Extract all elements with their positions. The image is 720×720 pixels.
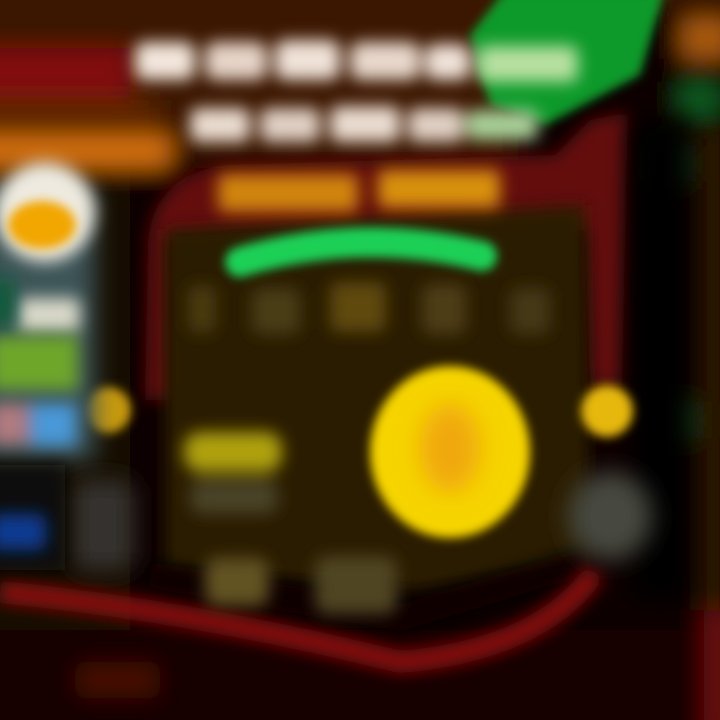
- left knob: [85, 387, 131, 433]
- top right green banner: [470, 0, 665, 125]
- gold heading: [218, 170, 500, 212]
- button 1: [205, 558, 269, 606]
- dark strip under screen: [150, 560, 590, 618]
- slot machine cabinet: [0, 112, 688, 662]
- large gold coin: [370, 366, 530, 538]
- dark right edge: [632, 120, 688, 600]
- neighbour body: [0, 190, 95, 460]
- stat caption: [190, 480, 278, 514]
- orange dial centre: [8, 201, 76, 249]
- cabinet screen: [165, 205, 590, 590]
- title line 1 on green: [478, 46, 578, 82]
- item 4: [422, 284, 466, 334]
- dark lower body: [0, 465, 65, 570]
- cabinet frame: [145, 112, 628, 400]
- white dial: [0, 162, 95, 262]
- item 1: [188, 285, 216, 333]
- white strip: [18, 298, 80, 332]
- left neighbouring machine: [0, 162, 95, 570]
- bottom buttons: [205, 556, 397, 614]
- title line 2: [190, 106, 463, 142]
- mixed colour strip: [0, 404, 76, 446]
- row of five dim items: [188, 282, 550, 334]
- bottom red detail: [75, 662, 160, 698]
- stat value: [184, 432, 282, 472]
- item 2: [252, 288, 300, 334]
- title line 2 on green: [466, 110, 538, 140]
- blue panel: [0, 514, 46, 550]
- right grey base: [568, 472, 652, 560]
- coin body: [370, 366, 530, 538]
- title line 1: [135, 40, 470, 80]
- bottom red rail: [0, 572, 595, 662]
- coin centre: [420, 404, 480, 492]
- item 3: [330, 282, 386, 332]
- green arc button: [240, 242, 482, 262]
- right knob: [581, 385, 633, 437]
- green strip: [0, 336, 78, 390]
- dark green edge: [0, 278, 14, 326]
- title: [135, 40, 578, 142]
- stat label: [184, 432, 282, 514]
- item 5: [510, 288, 550, 334]
- button 2: [315, 556, 397, 614]
- left grey base: [72, 480, 134, 570]
